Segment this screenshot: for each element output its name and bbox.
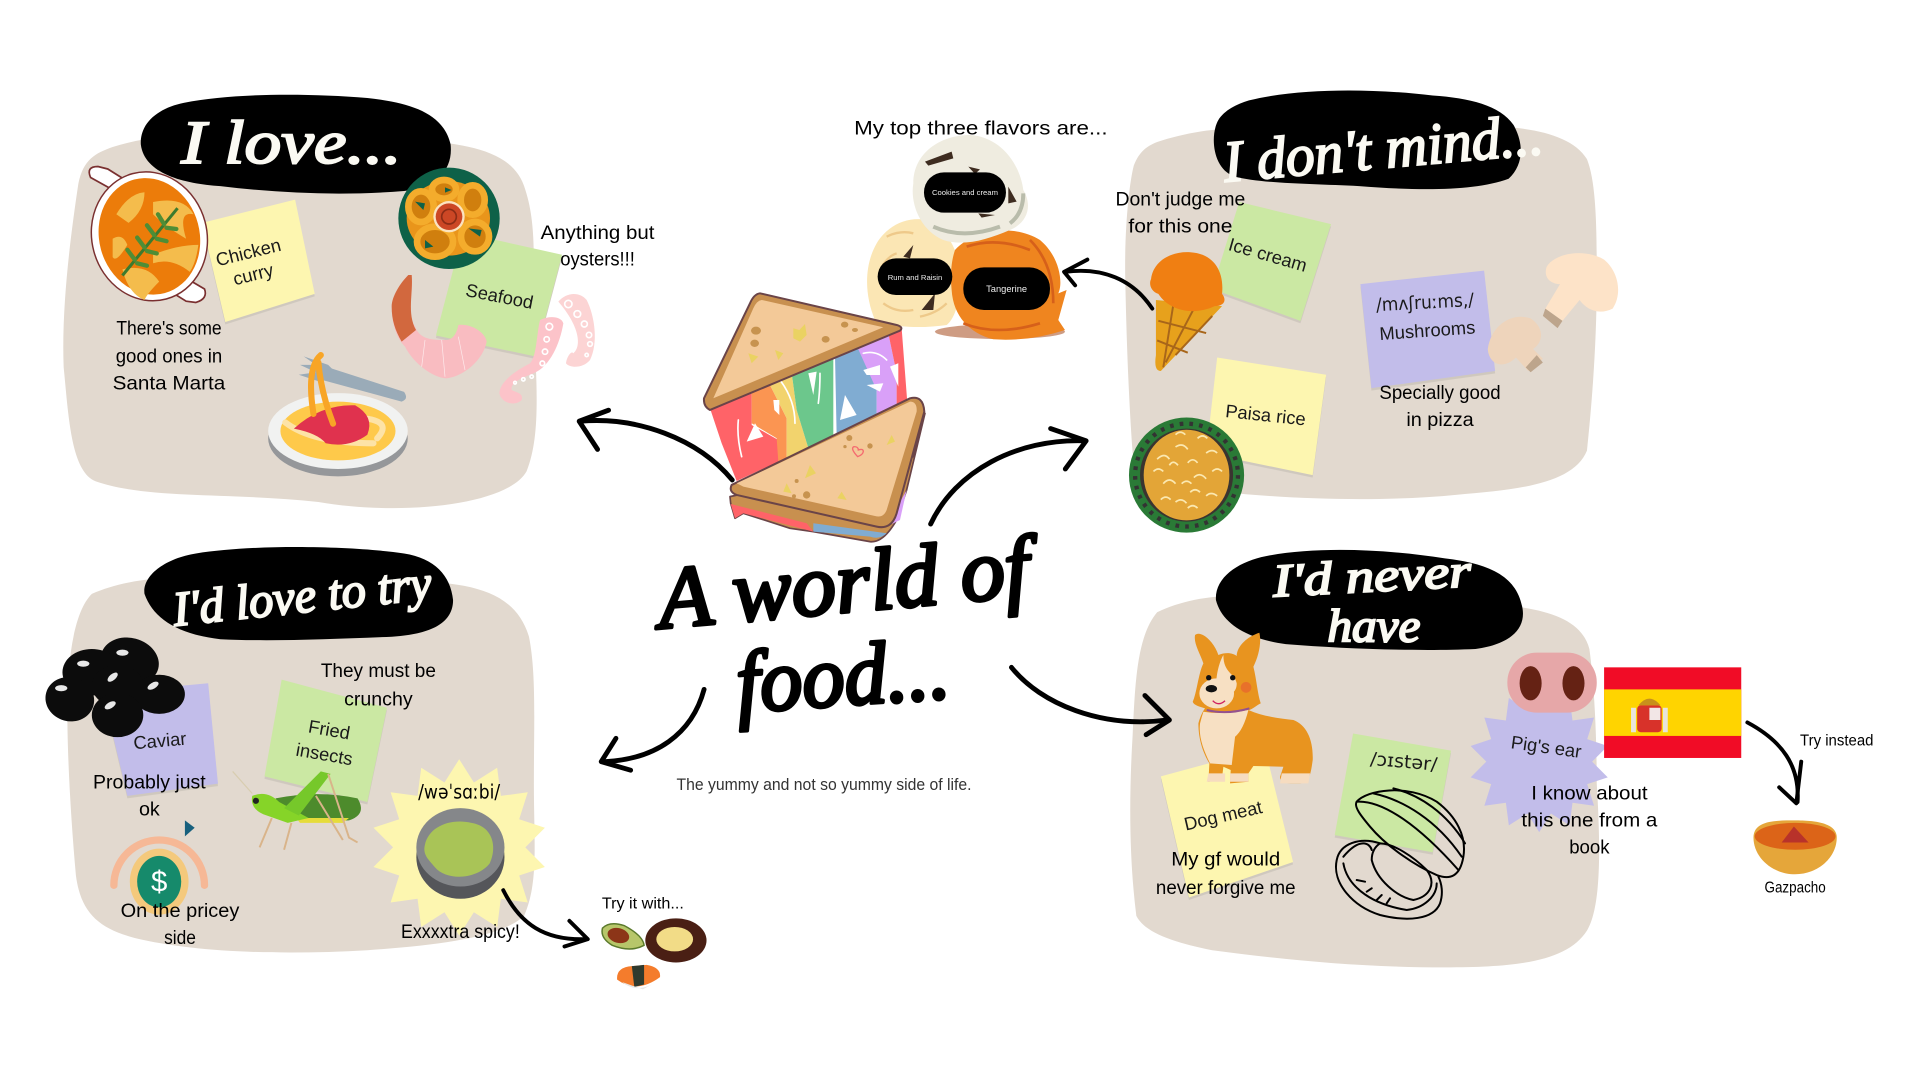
icon: ice cream cone bbox=[1150, 252, 1224, 371]
sticky note: Caviar: Caviar bbox=[132, 728, 187, 753]
label: Rum and Raisin: Rum and Raisin bbox=[888, 273, 942, 282]
icon: mushrooms bbox=[1488, 253, 1618, 372]
panel: I'd love to try bbox=[40, 547, 707, 989]
note: I know about this one from a book: this one from a bbox=[1521, 810, 1657, 832]
arrow: title to I'd never have bbox=[1011, 667, 1169, 735]
note: Try it with: Try it with... bbox=[602, 896, 684, 913]
sticky note: Fried insects: insects bbox=[294, 739, 354, 769]
label: Rum and Raisin bbox=[878, 258, 952, 295]
note: Don't judge me for this one bbox=[1116, 189, 1245, 238]
note: I know about this one from a book bbox=[1521, 783, 1657, 858]
arrow: sandwich to I love bbox=[579, 410, 732, 480]
panel background: I'd never have bbox=[1130, 596, 1599, 967]
label: Cookies and cream bbox=[924, 172, 1006, 213]
title: A world of food bbox=[649, 518, 1044, 732]
sticky note: Paisa rice: Paisa rice bbox=[1224, 400, 1307, 429]
note: There's some good ones in Santa Marta bbox=[113, 317, 225, 394]
note: My gf would never forgive me: never forgive me bbox=[1156, 877, 1296, 899]
panel background: I don't mind bbox=[1125, 125, 1597, 499]
icon: avocado, rice plate and sushi bbox=[602, 918, 707, 989]
icon: pig's ear burst with snout bbox=[1471, 653, 1608, 832]
note: Specially good in pizza: Specially good bbox=[1379, 382, 1501, 404]
sticky note: Seafood bbox=[436, 233, 562, 356]
heading: I love: I love... bbox=[180, 109, 402, 177]
sticky note: Fried insects: Fried bbox=[307, 716, 352, 743]
sticky note: Dog meat bbox=[1161, 748, 1293, 898]
note: There's some good ones in Santa Marta: There's some bbox=[116, 317, 222, 339]
sticky note: Mushrooms bbox=[1360, 271, 1495, 388]
heading: I'd love to try: I'd love to try bbox=[169, 555, 434, 637]
sticky note: oyster: /ɔɪstər/ bbox=[1369, 749, 1439, 776]
note: On the pricey side: side bbox=[164, 927, 196, 949]
heading: I don't mind: I don't mind... bbox=[1220, 102, 1546, 195]
icon: gazpacho bowl bbox=[1753, 820, 1837, 874]
sticky note: oyster bbox=[1335, 733, 1451, 852]
icon: oyster line art bbox=[1336, 788, 1465, 919]
label: Tangerine bbox=[963, 267, 1050, 310]
heading: I love bbox=[141, 95, 451, 194]
sticky note: Fried insects bbox=[264, 680, 387, 802]
panel: I love bbox=[63, 95, 655, 508]
panel: I don't mind bbox=[1116, 90, 1618, 533]
icon: shrimp bbox=[392, 275, 487, 378]
note: There's some good ones in Santa Marta: Santa Marta bbox=[113, 372, 225, 394]
note: I know about this one from a book: book bbox=[1569, 836, 1610, 858]
icon: spaghetti plate with fork bbox=[268, 355, 408, 476]
sticky note: Paisa rice bbox=[1206, 358, 1326, 475]
icon: caviar eggs bbox=[40, 631, 185, 737]
note: Gazpacho: Gazpacho bbox=[1765, 880, 1826, 897]
note: I know about this one from a book: I know about bbox=[1531, 783, 1648, 805]
sticky note: Chicken curry: Chicken bbox=[213, 234, 283, 270]
sticky note: Dog meat: Dog meat bbox=[1182, 796, 1264, 834]
sticky note: Caviar bbox=[103, 683, 218, 796]
note: Try instead: Try instead bbox=[1800, 733, 1873, 750]
icon: wasabi burst and bowl bbox=[373, 759, 545, 936]
note: On the pricey side: On the pricey bbox=[121, 900, 240, 922]
arrows between sections bbox=[503, 260, 1801, 947]
note: Don't judge me for this one: Don't judge me bbox=[1116, 189, 1245, 211]
sticky note: Ice cream: Ice cream bbox=[1226, 233, 1310, 276]
note: Specially good in pizza: in pizza bbox=[1406, 409, 1474, 431]
title: A world of food: A world of bbox=[649, 518, 1044, 649]
sticky note: Chicken curry: curry bbox=[231, 259, 276, 289]
icon: rainbow love sandwich bbox=[704, 293, 925, 542]
arrow: cone to ice cream scoops bbox=[1064, 260, 1152, 309]
note: Exxxxtra spicy: Exxxxtra spicy! bbox=[401, 921, 520, 943]
note: They must be crunchy: crunchy bbox=[344, 688, 413, 710]
icon: ice cream scoops bbox=[867, 135, 1067, 340]
note: My top three flavors are: My top three flavors are... bbox=[854, 118, 1108, 140]
phonetic: wasabi: /wəˈsɑːbi/ bbox=[418, 780, 501, 803]
sticky note: Ice cream bbox=[1212, 202, 1331, 321]
note: Don't judge me for this one: for this one bbox=[1128, 216, 1233, 238]
bottom bread slice bbox=[730, 413, 925, 542]
label: Cookies and cream: Cookies and cream bbox=[932, 188, 998, 197]
note: On the pricey side bbox=[121, 900, 240, 949]
icon: octopus tentacles bbox=[499, 294, 595, 403]
icon: pig's ear burst with snout: Pig's ear bbox=[1510, 731, 1583, 762]
arrow: wasabi to sides bbox=[503, 890, 588, 947]
note: My gf would never forgive me bbox=[1156, 849, 1296, 899]
icon: grasshopper bbox=[233, 771, 361, 850]
note: Anything but oysters bbox=[541, 222, 655, 271]
note: Probably just ok bbox=[93, 772, 206, 821]
title: A world of food: food... bbox=[733, 621, 953, 732]
heading: I'd never have: have bbox=[1327, 602, 1420, 653]
note: My gf would never forgive me: My gf would bbox=[1171, 849, 1280, 871]
panel background: I love bbox=[63, 135, 537, 508]
panel background: I'd love to try bbox=[67, 577, 535, 953]
sticky note: Mushrooms: /mʌʃruːms,/ bbox=[1376, 290, 1475, 316]
icon: flag of Spain bbox=[1604, 667, 1741, 758]
icon: price gauge with coin: $ bbox=[151, 865, 167, 898]
icon: curry pot bbox=[77, 159, 222, 314]
note: Anything but oysters: oysters!!! bbox=[560, 249, 635, 271]
note: Probably just ok: ok bbox=[139, 799, 160, 821]
arrow: flag to gazpacho bbox=[1747, 722, 1801, 803]
subtitle: The yummy and not so yummy side of life. bbox=[676, 776, 972, 794]
sticky note: Seafood: Seafood bbox=[464, 279, 535, 313]
icon: corgi bbox=[1193, 633, 1313, 783]
icon: paisa rice plate bbox=[1129, 418, 1244, 533]
note: There's some good ones in Santa Marta: good ones in bbox=[116, 345, 222, 367]
sticky note: Chicken curry bbox=[202, 200, 315, 322]
note: They must be crunchy bbox=[321, 660, 436, 710]
note: Probably just ok: Probably just bbox=[93, 772, 206, 794]
sticky note: Mushrooms: Mushrooms bbox=[1379, 316, 1476, 344]
icon: price gauge with coin bbox=[114, 820, 204, 915]
label: Tangerine: Tangerine bbox=[986, 284, 1027, 294]
arrow: sandwich to I don't mind bbox=[931, 429, 1086, 524]
arrow: title to I'd love to try bbox=[601, 689, 704, 770]
top bread slice bbox=[704, 293, 901, 410]
icon: onion rings plate bbox=[398, 168, 500, 269]
note: They must be crunchy: They must be bbox=[321, 660, 436, 682]
heading: I'd never have: I'd never bbox=[1270, 546, 1473, 608]
note: Anything but oysters: Anything but bbox=[541, 222, 655, 244]
heading: I'd never have bbox=[1216, 546, 1523, 653]
panel: I'd never have bbox=[1130, 546, 1873, 967]
note: Specially good in pizza bbox=[1379, 382, 1501, 431]
